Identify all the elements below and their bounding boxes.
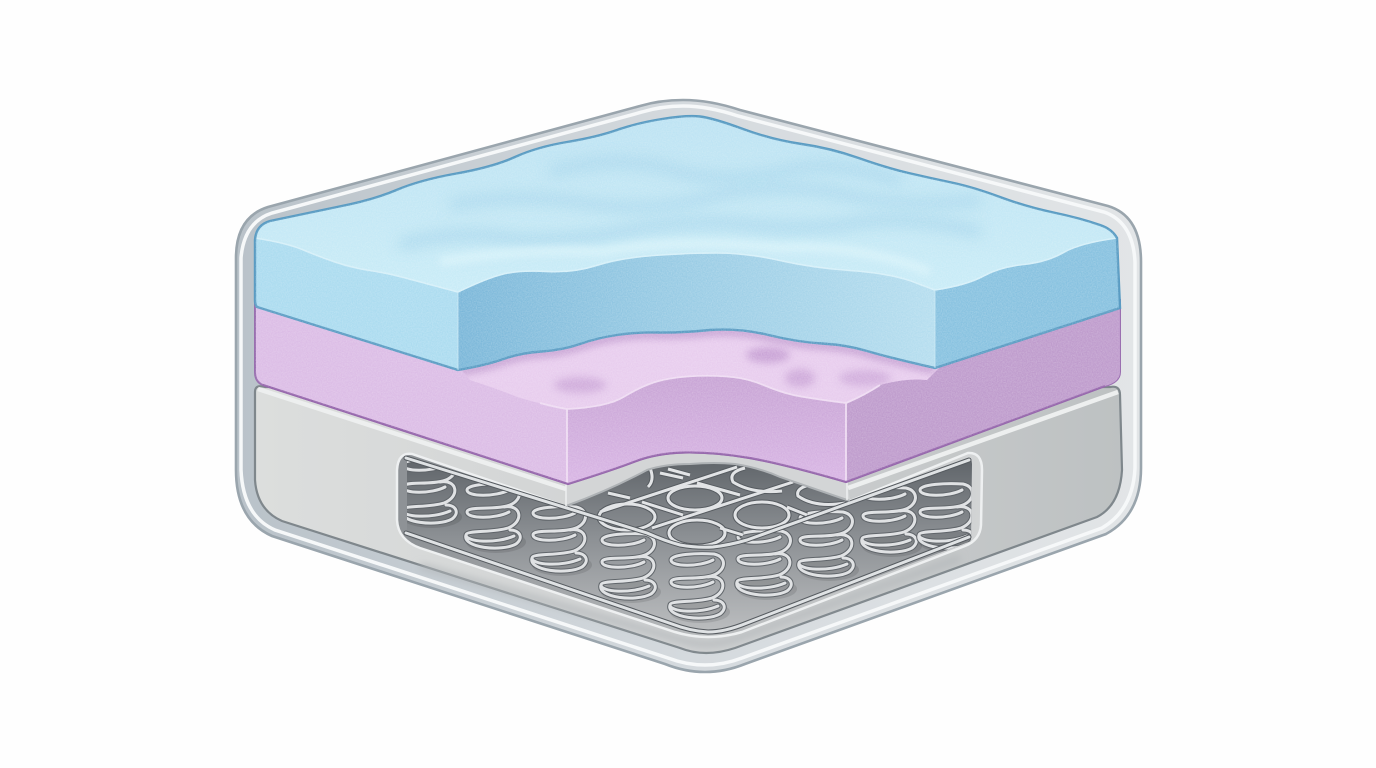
white seam strips under foam — [258, 389, 1118, 489]
front cut face — [567, 376, 846, 484]
top surface with soft waves — [255, 116, 1117, 292]
front cut face — [458, 253, 935, 370]
base layer: grey support casing — [255, 386, 1122, 653]
coil springs — [402, 459, 979, 623]
foam outline — [255, 116, 1120, 370]
left face — [255, 238, 458, 370]
foam grain texture — [250, 110, 1130, 490]
top wire grid — [599, 467, 845, 546]
top surface with dimples — [458, 320, 945, 409]
right face — [935, 238, 1120, 368]
blue memory foam top layer — [255, 116, 1120, 370]
foam edge highlights — [255, 238, 1117, 292]
wire frame rims — [406, 458, 969, 632]
ledge under comfort layer — [566, 452, 850, 506]
right face — [846, 305, 1120, 482]
purple comfort foam layer — [255, 300, 1120, 484]
mattress outer shell — [236, 100, 1141, 672]
foam body — [255, 300, 1120, 484]
spring pocket — [397, 453, 982, 637]
illustration: mattress cutaway — [234, 98, 1142, 674]
